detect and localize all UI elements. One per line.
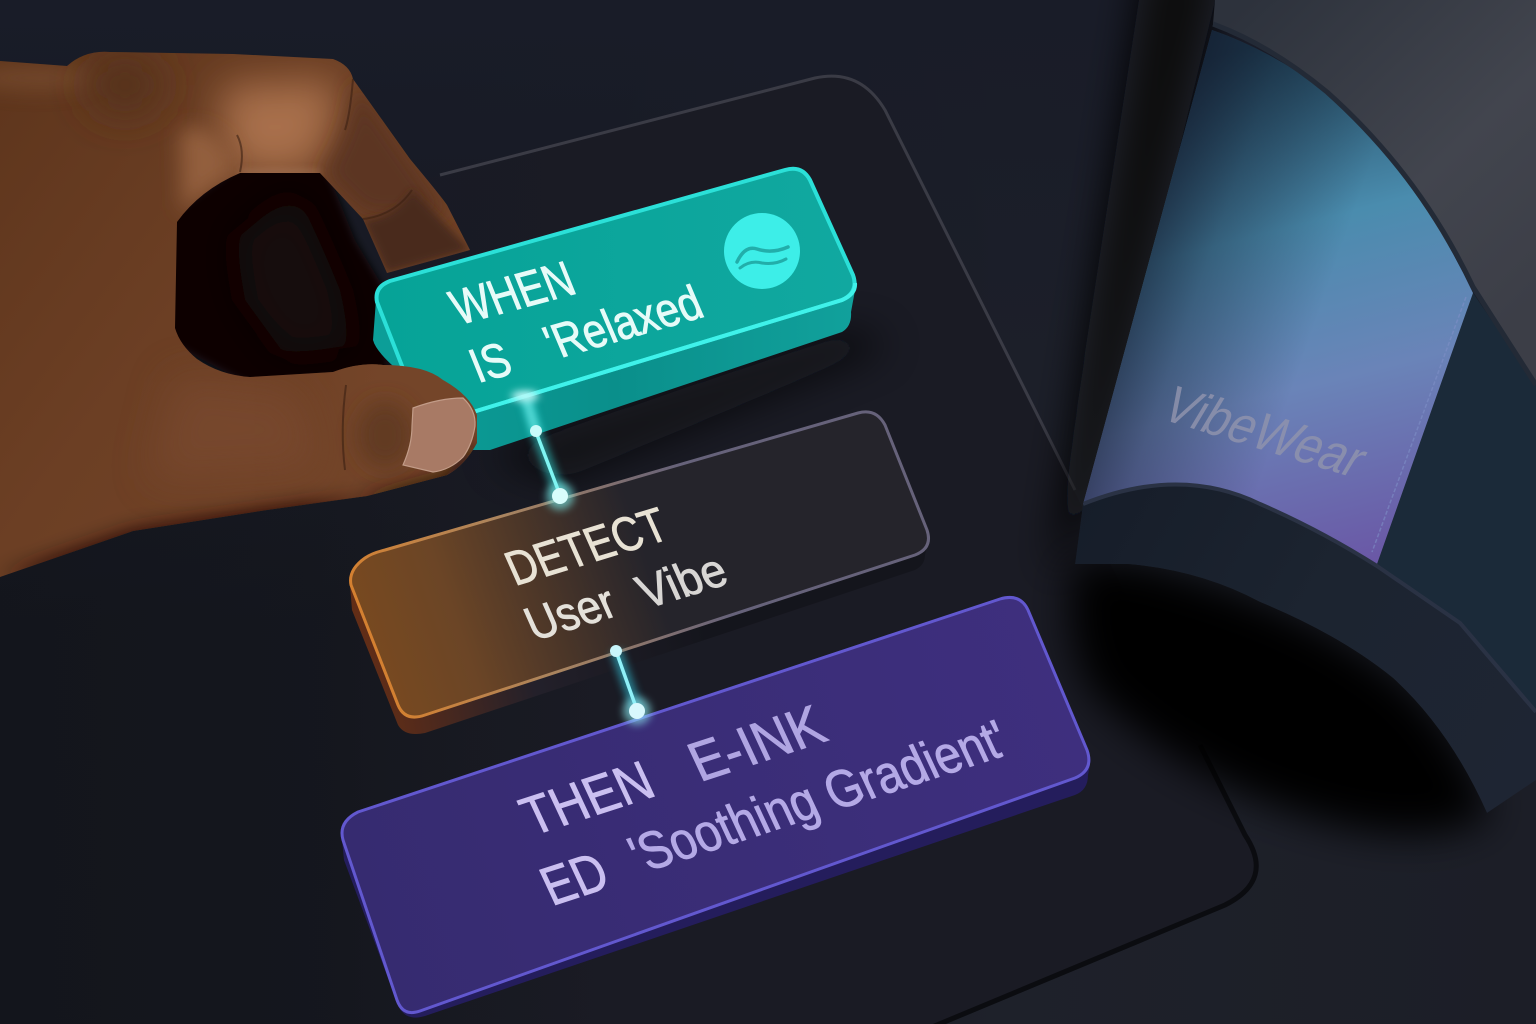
text: E-INK: E-INK xyxy=(679,694,835,793)
text: ED: ED xyxy=(531,841,618,917)
block side: THEN xyxy=(342,765,1090,1018)
text: Vibe: Vibe xyxy=(628,543,735,618)
block: WHEN IS 'Relaxed xyxy=(373,169,856,450)
sleeve: gray upper fabric xyxy=(1213,0,1536,385)
hand: knuckle creases xyxy=(237,79,412,219)
text: 'Relaxed: 'Relaxed xyxy=(536,275,711,370)
text: WHEN: WHEN xyxy=(442,251,583,335)
VibeWear sleeve xyxy=(1075,0,1536,813)
text: THEN: THEN xyxy=(511,751,664,848)
block side: DETECT xyxy=(350,540,928,734)
icon: calm waves xyxy=(724,213,800,289)
icon-like detail: thumbnail xyxy=(403,398,475,472)
connector: WHEN to DETECT xyxy=(511,391,574,510)
text: DETECT: DETECT xyxy=(497,497,676,596)
thumb joint crease xyxy=(343,385,346,470)
sleeve: gradient e-ink panel xyxy=(1083,30,1473,564)
hand: thumb over block xyxy=(318,364,477,502)
lit bottom edge xyxy=(440,283,855,422)
text: 'Soothing Gradient': 'Soothing Gradient' xyxy=(619,708,1017,885)
block: DETECT User Vibe xyxy=(351,412,928,717)
cuff opening shadow xyxy=(1070,560,1490,834)
hand: palm and index finger xyxy=(0,52,477,577)
block: THEN E-INK ED 'Soothing Gradient' xyxy=(342,597,1089,1013)
sleeve: dark lower fabric xyxy=(1377,293,1536,720)
text: User: User xyxy=(516,575,624,651)
hand: shadow gap between fingers xyxy=(165,165,388,385)
block shadow: WHEN xyxy=(490,330,890,480)
connector: DETECT to THEN xyxy=(610,645,651,725)
hand: middle finger in shadow xyxy=(235,190,352,355)
sleeve: cuff seam xyxy=(1083,484,1536,712)
text: IS: IS xyxy=(461,332,519,393)
block side xyxy=(373,285,856,450)
tablet panel xyxy=(320,76,1256,1024)
sleeve: cuff band xyxy=(1075,484,1536,813)
sleeve: top seam xyxy=(1213,24,1536,385)
sleeve shadow xyxy=(1050,0,1225,580)
block top face xyxy=(377,169,855,423)
label: VibeWear: VibeWear xyxy=(1152,376,1379,488)
